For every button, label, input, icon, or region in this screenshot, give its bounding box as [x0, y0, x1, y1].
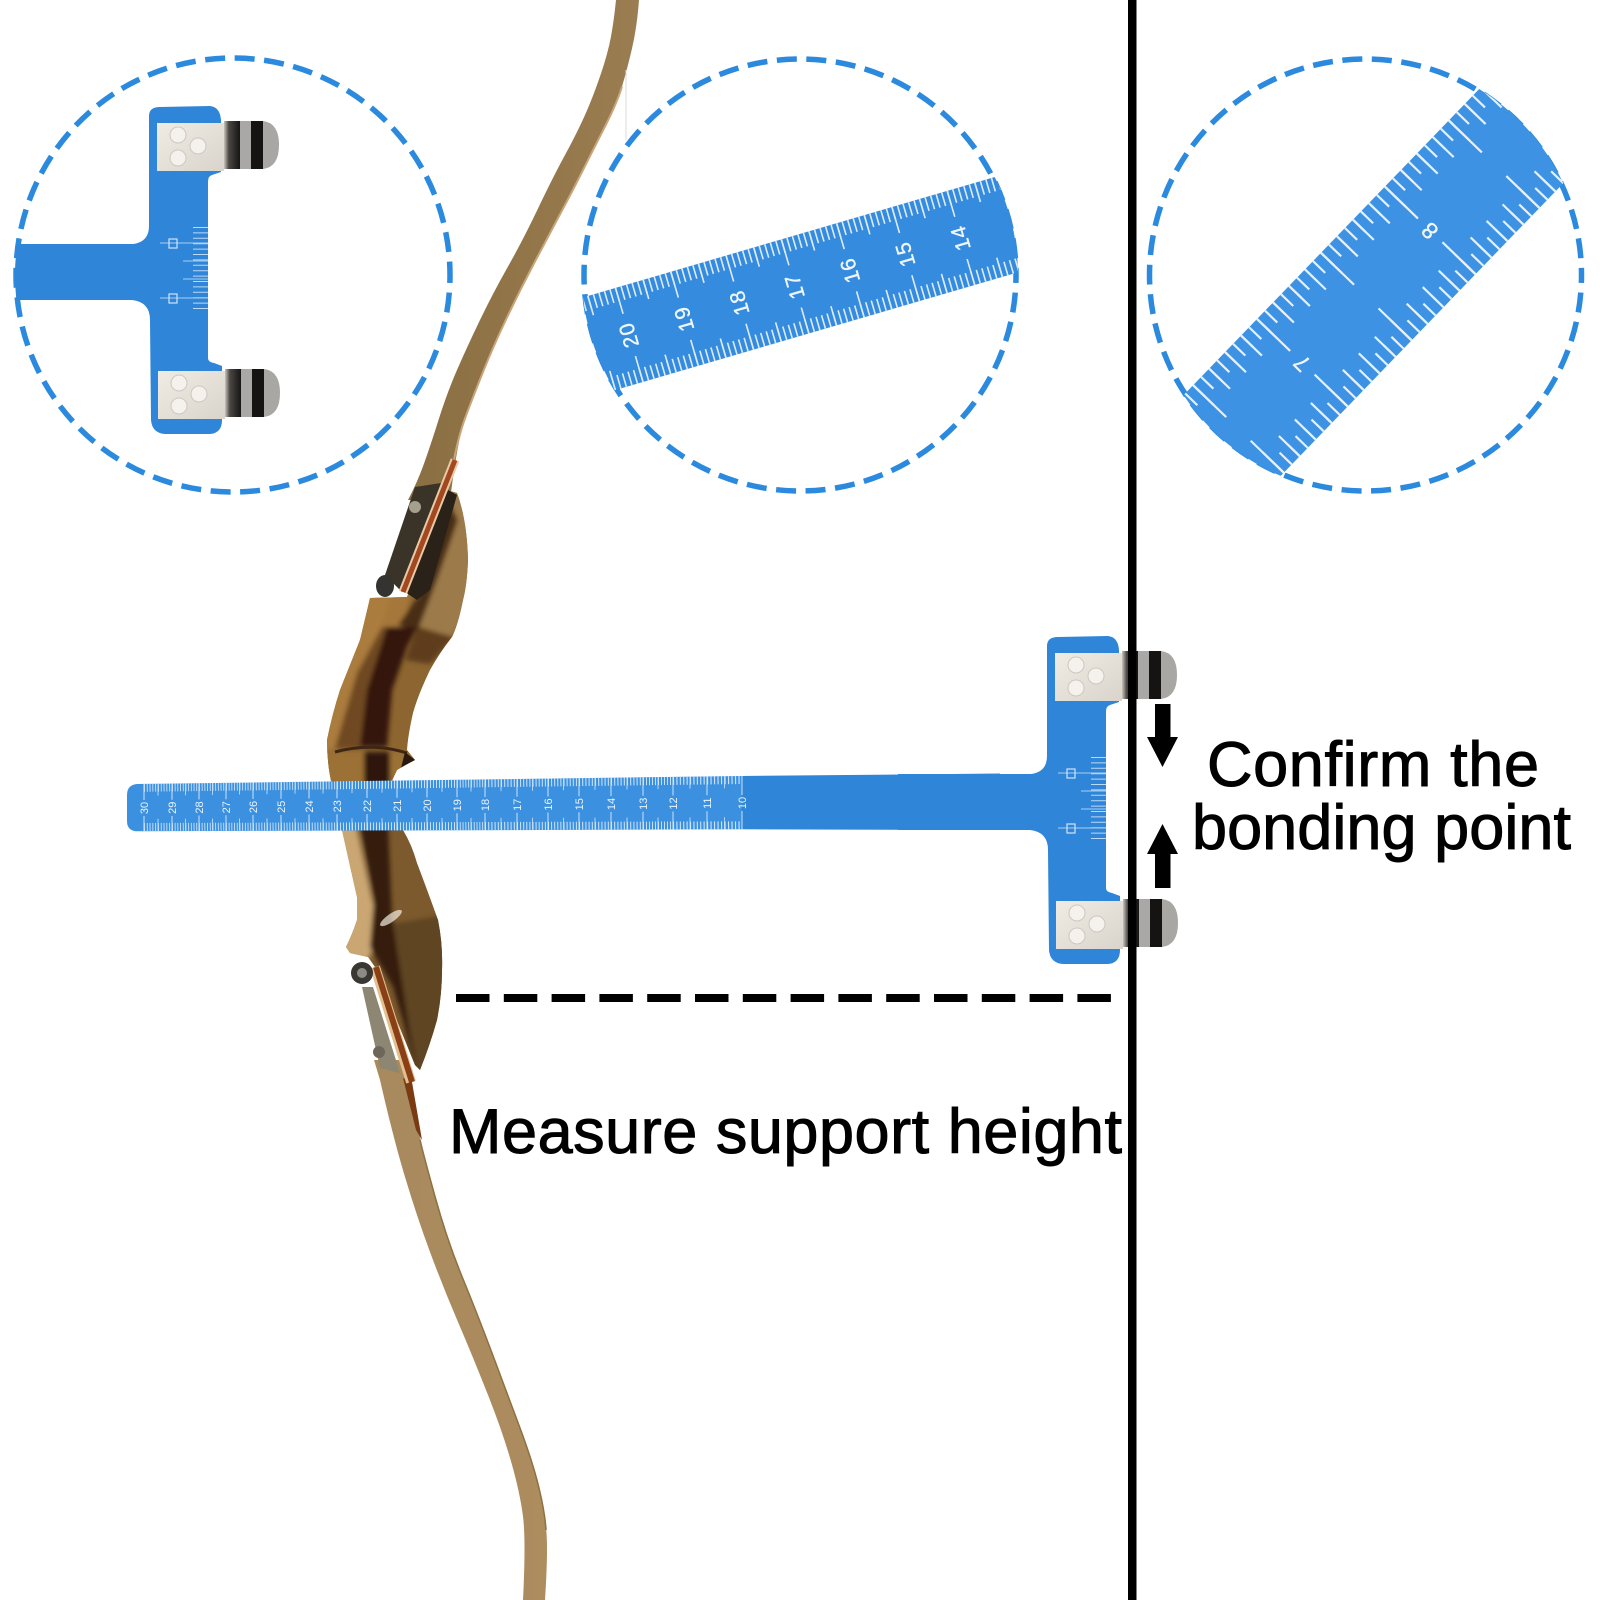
ruler mid ticks	[158, 776, 724, 831]
callout: confirm the bonding point: Confirm the	[1207, 730, 1539, 800]
ruler band: 20	[615, 319, 644, 350]
ruler band	[1184, 89, 1564, 476]
ruler numbers 30 to 10: 16	[543, 798, 555, 811]
ruler band: 16	[836, 255, 865, 286]
ruler numbers 30 to 10: 21	[392, 800, 404, 812]
upper limb	[408, 0, 639, 500]
ruler band: 14	[947, 222, 976, 253]
ruler numbers 30 to 10: 11	[702, 797, 714, 809]
main T-ruler	[127, 636, 1178, 964]
T-ruler head with clips	[0, 106, 280, 434]
ruler band: 8	[1416, 217, 1443, 245]
upper riser	[327, 491, 468, 782]
upper dark wedge behind limb	[405, 490, 457, 600]
lower limb laminate stripe	[375, 967, 412, 1082]
arrow: up	[1147, 824, 1178, 888]
zoom circle: T-ruler head	[0, 58, 450, 492]
lower bracket bolts	[351, 962, 385, 1058]
ruler band: 17	[781, 271, 810, 302]
dashed circle outline	[16, 58, 450, 492]
ruler numbers 30 to 10: 29	[167, 802, 179, 814]
ruler numbers 30 to 10: 27	[221, 801, 233, 813]
bottom minor ticks	[144, 819, 742, 833]
vertical black string line	[1128, 0, 1136, 1600]
ruler numbers 30 to 10: 17	[512, 799, 524, 811]
T-ruler head with clips	[898, 636, 1178, 964]
ruler numbers 30 to 10: 24	[304, 800, 316, 813]
ruler numbers 30 to 10: 28	[194, 801, 206, 814]
ruler numbers 30 to 10: 26	[248, 801, 260, 813]
callout: confirm the bonding point	[1192, 730, 1571, 863]
callout: measure support height: Measure support height	[449, 1097, 1122, 1167]
upper limb edge highlight	[452, 86, 622, 470]
lower limb edge line	[420, 1140, 546, 1530]
ruler band: 18	[725, 287, 755, 318]
ruler numbers 30 to 10: 25	[276, 801, 288, 813]
ruler major ticks	[144, 776, 742, 831]
ruler numbers 30 to 10	[139, 797, 749, 814]
upper bracket bolts	[376, 501, 421, 597]
top minor ticks	[144, 780, 742, 788]
ruler numbers 30 to 10: 10	[737, 797, 749, 809]
ruler numbers 30 to 10: 12	[668, 797, 680, 810]
arrow: down	[1147, 704, 1178, 767]
ruler numbers 30 to 10: 30	[139, 802, 151, 814]
dashed circle outline	[1150, 59, 1582, 491]
upper limb metal bracket	[385, 483, 441, 592]
ruler numbers 30 to 10: 15	[574, 798, 586, 810]
ruler numbers 30 to 10: 14	[606, 798, 618, 810]
ruler numbers 30 to 10: 22	[362, 800, 374, 812]
upper limb laminate stripe	[403, 460, 455, 592]
callout: confirm the bonding point: bonding point	[1192, 793, 1571, 863]
zoom circle: scale 7 to 8	[1146, 56, 1584, 494]
ruler band: 7	[1288, 349, 1316, 377]
lower riser	[342, 830, 442, 1070]
string trace	[625, 70, 627, 140]
dashed circle outline	[584, 59, 1016, 491]
ruler numbers 30 to 10: 13	[638, 798, 650, 810]
ruler band: 19	[670, 303, 699, 334]
ruler numbers 30 to 10: 20	[422, 799, 434, 812]
ruler band	[583, 177, 1018, 390]
recurve bow	[315, 0, 639, 1600]
zoom circle: scale 20 to 14	[581, 56, 1019, 494]
ruler strip plain section	[742, 774, 1000, 830]
lower limb red sliver	[403, 1078, 422, 1140]
ruler numbers 30 to 10: 19	[452, 799, 464, 811]
ruler numbers 30 to 10: 23	[332, 800, 344, 812]
dashed height line	[456, 994, 1112, 1002]
ruler band: 15	[891, 239, 920, 269]
lower limb metal bracket	[362, 987, 400, 1073]
lower limb	[374, 1060, 547, 1600]
ruler strip scale section	[127, 776, 742, 831]
ruler numbers 30 to 10: 18	[480, 799, 492, 811]
